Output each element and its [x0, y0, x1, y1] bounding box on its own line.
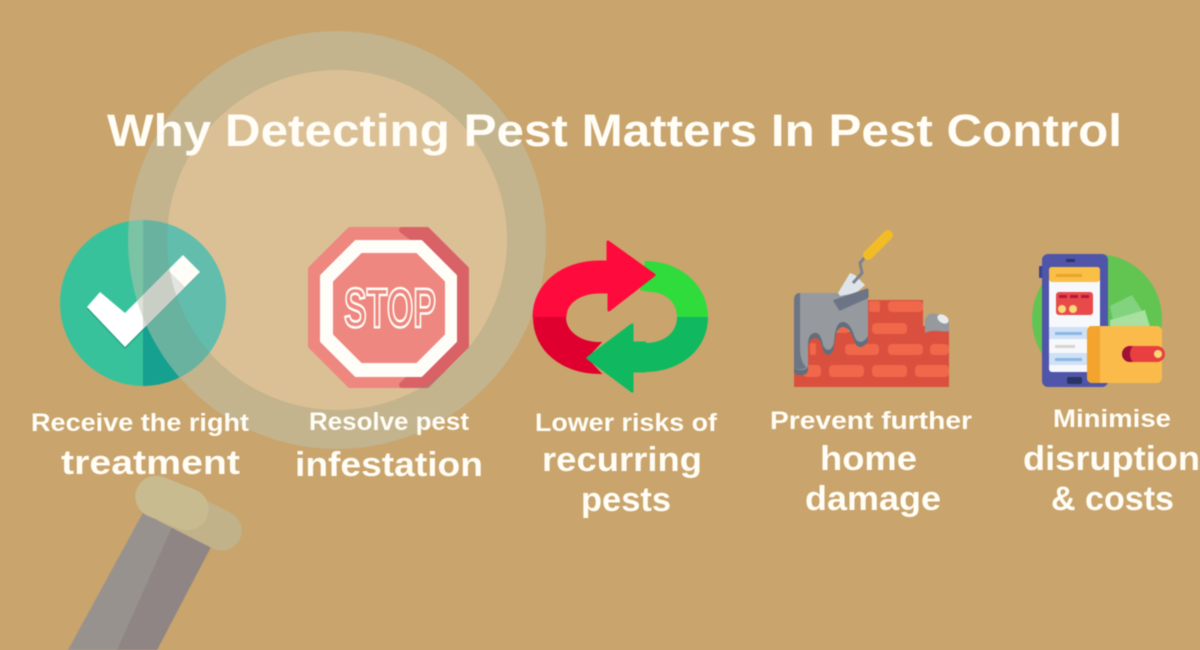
wallet	[1087, 326, 1165, 383]
label: prevent further home damage	[770, 407, 972, 518]
label: prevent further home damage: damage	[805, 480, 941, 518]
label: minimise disruption and costs: & costs	[1051, 480, 1174, 518]
icon: stop sign: STOP	[344, 276, 436, 339]
label: minimise disruption and costs: Minimise	[1053, 405, 1171, 433]
label: lower risks of recurring pests: Lower risks of	[535, 409, 718, 437]
green arrow	[632, 260, 709, 394]
icon: green check mark	[59, 220, 227, 387]
trowel	[835, 235, 888, 309]
wall	[794, 300, 949, 387]
mortar on wall	[925, 314, 949, 333]
banknotes	[1110, 295, 1151, 330]
title: Why Detecting Pest Matters In Pest Control	[107, 105, 1122, 156]
handle	[68, 509, 212, 650]
mortar	[794, 293, 868, 370]
label: prevent further home damage: Prevent further	[770, 407, 972, 435]
green circle	[1032, 254, 1162, 384]
label: receive the right treatment: Receive the right	[31, 409, 250, 437]
lens glass	[167, 70, 507, 410]
magnifying glass	[68, 31, 546, 650]
label: resolve pest infestation: infestation	[295, 446, 483, 484]
label: lower risks of recurring pests: pests	[581, 481, 671, 519]
label: lower risks of recurring pests: recurring	[542, 441, 702, 479]
collar	[129, 469, 249, 558]
label: receive the right treatment: treatment	[61, 444, 240, 482]
label: resolve pest infestation	[295, 408, 483, 484]
icon: recurring arrows	[534, 242, 708, 393]
label: resolve pest infestation: Resolve pest	[309, 408, 470, 436]
label: receive the right treatment	[31, 409, 250, 482]
icon: brick wall and trowel	[794, 235, 950, 387]
mortar shadow	[794, 298, 868, 375]
label: lower risks of recurring pests	[535, 409, 718, 519]
label: prevent further home damage: home	[820, 440, 917, 478]
label: minimise disruption and costs: disruption	[1023, 440, 1200, 478]
icon: phone and wallet	[1032, 254, 1165, 387]
icon: stop sign	[311, 230, 466, 385]
label: minimise disruption and costs	[1023, 405, 1200, 518]
red arrow	[534, 242, 654, 373]
bricks	[803, 301, 949, 377]
lens ring	[128, 31, 546, 449]
phone	[1039, 254, 1108, 387]
